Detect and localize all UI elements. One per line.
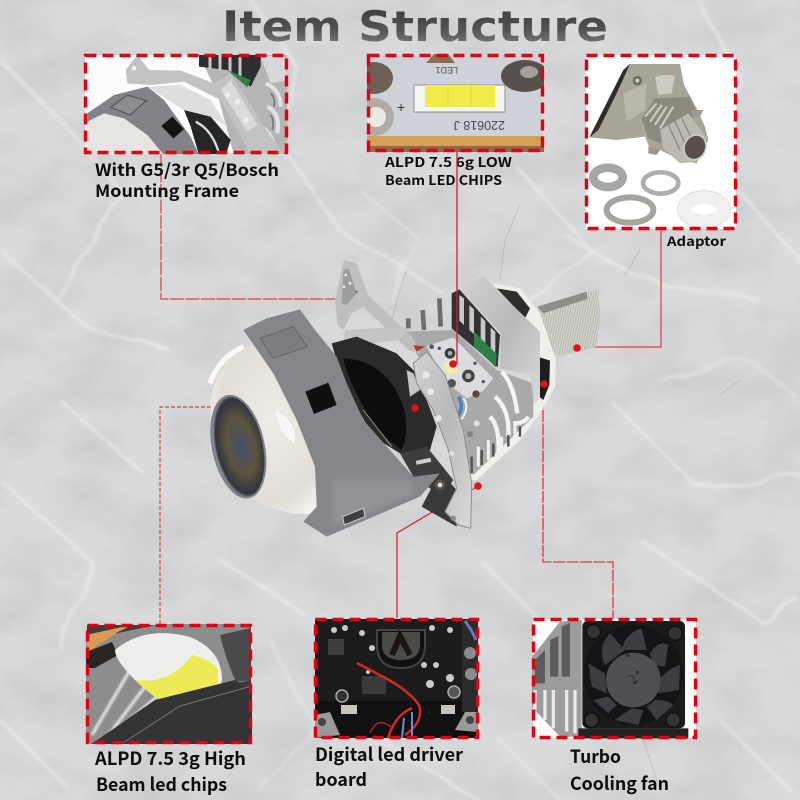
panel text: driver board: Digital led driver: [315, 741, 463, 767]
panel: cooling fan photo: [532, 619, 696, 738]
leader line: mounting frame: [161, 153, 357, 303]
gray shroud: [243, 309, 440, 537]
panel text: high beam chips: Beam led chips: [96, 771, 227, 797]
inset fan blades: [588, 628, 680, 725]
inset black reflector: [184, 110, 231, 155]
panel text: low beam chips: ALPD 7.5 6g LOW: [384, 151, 513, 171]
panel: high beam chip photo: [86, 624, 252, 745]
glass lens dome: [203, 343, 323, 514]
headlight projector lens product photo: [203, 260, 600, 537]
panel text: mounting frame: Mounting Frame: [95, 177, 239, 202]
panel text: cooling fan: [570, 743, 669, 796]
panel text: adaptor: Adaptor: [666, 231, 726, 250]
leader line: high beam chips: [160, 407, 415, 624]
leader line: driver board: [397, 511, 434, 618]
panel: adaptor photo: [586, 55, 736, 229]
inset fins: [532, 620, 582, 737]
inset gray shroud: [87, 87, 199, 155]
title: Item Structure: [222, 2, 608, 51]
panel: driver board photo: [315, 619, 478, 738]
panel text: driver board: board: [315, 766, 367, 792]
led circuit board: [427, 337, 493, 419]
panel text: cooling fan: Turbo: [570, 743, 621, 769]
panel text: mounting frame: [95, 156, 279, 202]
inset lens dome: [87, 113, 164, 155]
panel text: low beam chips: Beam LED CHIPS: [385, 169, 502, 189]
panel text: cooling fan: Cooling fan: [570, 770, 669, 796]
panel: low beam led chip photo: +: [397, 99, 405, 115]
adaptor body: [589, 64, 708, 163]
leader line: low beam chips: [449, 151, 457, 368]
inset fins: [199, 55, 287, 155]
panel: low beam led chip photo: LED1: [435, 65, 458, 75]
inset fan frame: [582, 621, 685, 728]
inset silver frame: [126, 55, 284, 155]
leader line: small stub near flange: [472, 486, 478, 490]
panel text: driver board: [315, 741, 463, 792]
heat sink body: [403, 277, 540, 475]
leader line: adaptor: [577, 229, 661, 347]
panel: mounting frame photo: [85, 55, 287, 155]
reflector and black shield: [332, 337, 457, 527]
adaptor threaded barrel: [642, 97, 697, 143]
mounting bracket: [335, 260, 441, 353]
panel: low beam led chip photo: 220618 J: [454, 118, 505, 132]
panel text: high beam chips: [94, 745, 246, 797]
front flange: [413, 352, 472, 528]
dots on product: [411, 344, 581, 490]
rear white cap: [463, 283, 556, 481]
leader line: cooling fan: [543, 383, 613, 618]
adaptor rings: [593, 168, 731, 228]
panel text: low beam chips: [384, 151, 513, 189]
threaded bulb socket: [537, 290, 600, 357]
panel: low beam led chip photo: [354, 54, 549, 152]
panel text: mounting frame: With G5/3r Q5/Bosch: [95, 156, 279, 181]
panel text: high beam chips: ALPD 7.5 3g High: [94, 745, 246, 771]
